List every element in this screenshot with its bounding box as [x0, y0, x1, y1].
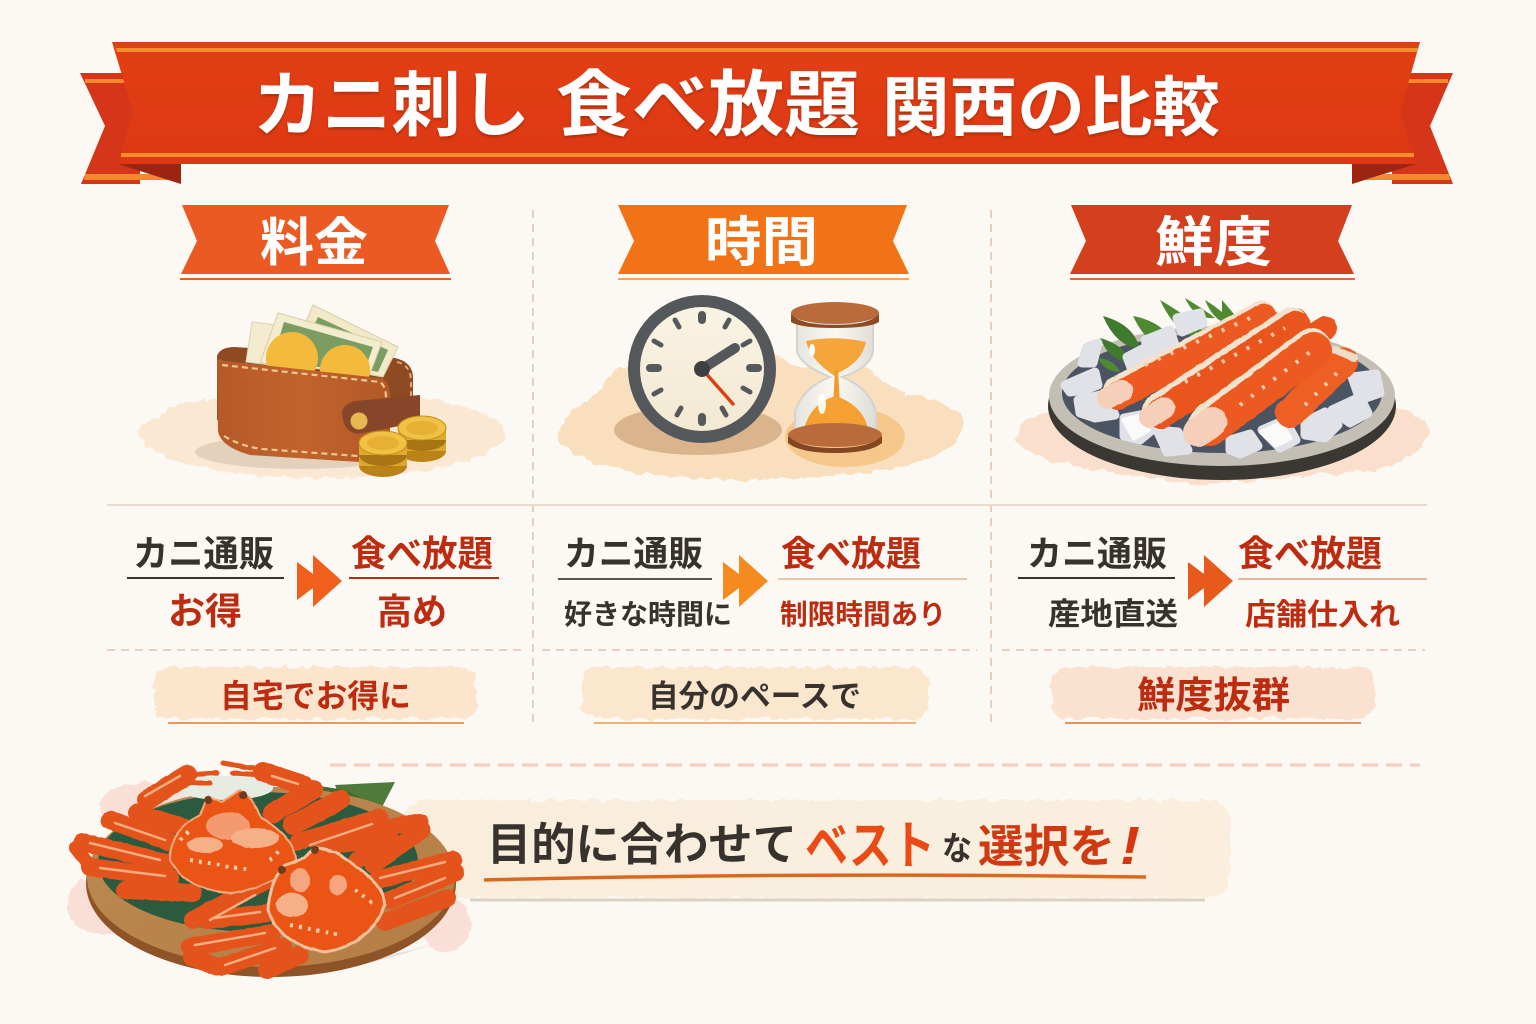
- message text: ベスト: [805, 818, 935, 876]
- comparison: カニ通販 vs 食べ放題: [1018, 533, 1427, 632]
- heading ribbon: 時間: [618, 205, 909, 280]
- callout: 自宅でお得に: [154, 667, 476, 724]
- comparison: カニ通販 vs 食べ放題: [127, 533, 499, 632]
- left ribbon tail: [80, 73, 181, 184]
- leg 3: [1207, 347, 1312, 424]
- icon: wallet with money and coins: [139, 305, 505, 478]
- cream band: [402, 800, 1230, 898]
- callout: 鮮度抜群: [1052, 667, 1374, 724]
- panel: 鮮度: [1015, 205, 1428, 724]
- callout: 自分のペースで: [582, 667, 928, 724]
- title text: [253, 66, 1220, 146]
- message text: !: [1120, 816, 1140, 876]
- comparison: カニ通販 vs 食べ放題: カニ通販: [1027, 535, 1167, 574]
- back pieces: [1300, 328, 1325, 345]
- title text: 食べ放題: [556, 66, 860, 146]
- comparison: カニ通販 vs 食べ放題: お得: [168, 591, 242, 632]
- panel: 料金: [127, 205, 505, 724]
- bottom message banner: [402, 800, 1230, 900]
- column dividers: [107, 210, 1427, 725]
- ice: [1065, 313, 1380, 454]
- comparison: カニ通販 vs 食べ放題: 制限時間あり: [780, 599, 946, 630]
- title text: カニ刺し: [253, 67, 530, 146]
- comparison: カニ通販 vs 食べ放題: 店舗仕入れ: [1245, 599, 1400, 632]
- icon: crab legs on iced plate: [1015, 298, 1428, 485]
- leg 2: [1158, 323, 1292, 410]
- comparison: カニ通販 vs 食べ放題: 産地直送: [1048, 597, 1178, 632]
- title text: 関西の比較: [882, 71, 1220, 144]
- leg 1: [1118, 316, 1262, 391]
- comparison: カニ通販 vs 食べ放題: 食べ放題: [781, 535, 921, 574]
- heading ribbon: 時間: 時間: [705, 213, 818, 273]
- callout: 鮮度抜群: 鮮度抜群: [1137, 675, 1290, 716]
- bottom dashed rule: [330, 764, 1420, 766]
- heading ribbon: 料金: 料金: [260, 215, 368, 273]
- callout: 自分のペースで: 自分のペースで: [648, 679, 861, 714]
- right ribbon tail: [1352, 73, 1453, 184]
- leg 4: [1290, 362, 1343, 413]
- message text: 目的に合わせて: [487, 819, 797, 870]
- comparison: カニ通販 vs 食べ放題: 高め: [377, 591, 447, 632]
- message text: な: [942, 830, 972, 867]
- title ribbon: [80, 42, 1453, 184]
- crab shell left: [170, 790, 296, 893]
- comparison: カニ通販 vs 食べ放題: 食べ放題: [351, 533, 493, 574]
- heading ribbon: 鮮度: [1070, 205, 1355, 280]
- main ribbon band: [112, 42, 1420, 164]
- message text: [487, 816, 1140, 876]
- icon: clock and hourglass: [559, 295, 962, 480]
- comparison: カニ通販 vs 食べ放題: カニ通販: [564, 535, 703, 574]
- heading ribbon: 鮮度: 鮮度: [1155, 213, 1272, 273]
- underlines: [470, 875, 1205, 900]
- comparison: カニ通販 vs 食べ放題: 好きな時間に: [564, 599, 732, 630]
- heading ribbon: 料金: [180, 205, 451, 280]
- leaves: [1098, 298, 1240, 372]
- crab leg meats: [1108, 316, 1354, 432]
- crab shell right: [268, 846, 385, 952]
- comparison: カニ通販 vs 食べ放題: [558, 535, 967, 630]
- comparison: カニ通販 vs 食べ放題: 食べ放題: [1238, 533, 1382, 574]
- crab legs: [76, 763, 455, 970]
- panel: 時間: [558, 205, 967, 724]
- callout: 自宅でお得に: 自宅でお得に: [220, 678, 411, 714]
- message text: 選択を: [978, 821, 1115, 872]
- hourglass: [788, 302, 882, 453]
- clock: [628, 295, 776, 443]
- comparison: カニ通販 vs 食べ放題: カニ通販: [133, 533, 274, 574]
- illustration: crabs on wooden plate: [67, 763, 471, 977]
